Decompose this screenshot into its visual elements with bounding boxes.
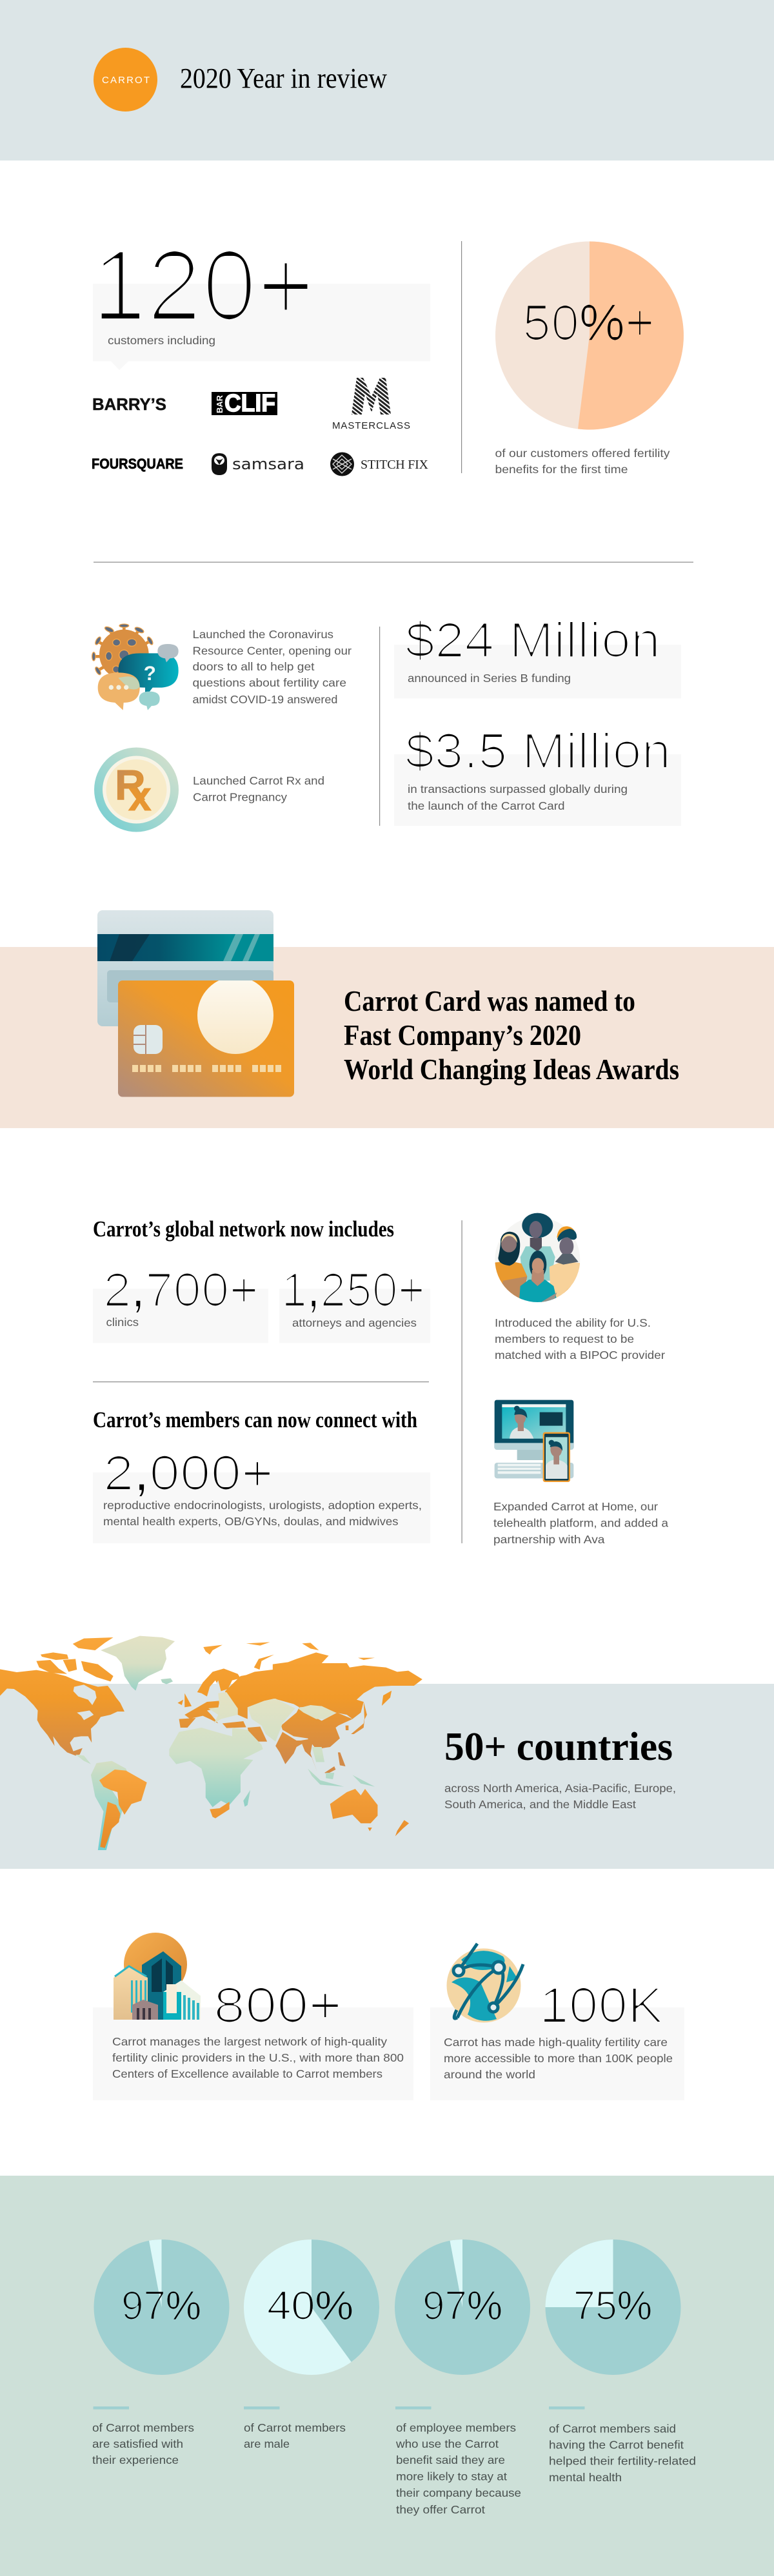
logo: Stitch Fix: STITCH FIX [361,458,429,472]
text: accessibility [444,2036,673,2081]
text: Carrot at Home: Expanded Carrot at Home, our [493,1500,658,1513]
stat: attorneys and agencies: 1,250+ [281,1264,425,1316]
stat: clinics: clinics [106,1316,139,1329]
text: BIPOC provider: Introduced the ability for U.S. [495,1316,651,1329]
stat column: 75% mental health: helped their fertility-related [549,2455,696,2468]
icon: coronavirus with speech bubbles [92,624,179,710]
pie caption: of our customers offered fertility [495,447,670,460]
text: clinic network: Centers of Excellence available to Carrot members [112,2067,382,2080]
stat column: 40% male: of Carrot members [244,2421,346,2434]
illustration: front of card [118,977,294,1097]
stat column: 97% satisfied: of Carrot members [92,2421,194,2434]
text: Carrot Rx [193,774,324,803]
customers label: customers including [108,334,215,347]
logo: Carrot: CARROT [102,75,150,86]
customers callout box [93,284,430,370]
text: Carrot at Home: telehealth platform, and added a [493,1516,668,1529]
icon: telehealth computer and phone [495,1400,573,1482]
stat: $24 Million: $24 Million [405,613,660,668]
providers label: reproductive endocrinologists, urologists, adoption experts, [103,1499,422,1512]
heading: award [344,985,679,1086]
stat column: 40% male [244,2239,379,2450]
panel: member stats [0,2176,774,2576]
world map [0,1636,422,1850]
heading: award: Fast Company’s 2020 [344,1019,581,1051]
transactions label: in transactions surpassed globally during [408,783,628,795]
text: accessibility: around the world [444,2068,535,2081]
icon: Rx badge: x [128,773,152,819]
stat: 120+: 120+ [92,229,315,341]
logo: Clif Bar: CLIF [224,390,275,417]
heading: award: World Changing Ideas Awards [344,1053,679,1086]
panel: Carrot Card award [0,910,774,1128]
stat column: 97% retention [395,2239,530,2516]
panel: global network [93,1216,430,1543]
stat: clinics: 2,700+ [103,1264,259,1316]
text: clinic network [112,2035,404,2080]
stat column: 40% male: 40% [267,2283,353,2328]
stat column: 97% satisfied: 97% [121,2283,201,2328]
icon: group of women [490,1213,580,1304]
stat: attorneys and agencies: attorneys and agencies [292,1316,417,1329]
icon: Rx badge: R [115,761,146,808]
text: coronavirus resource center: questions about fertility care [192,676,346,689]
icon: connected globe [446,1944,523,2023]
stat column: 97% retention: benefit said they are [396,2454,505,2466]
stat column: 97% retention: 97% [422,2283,502,2328]
text: clinic network: Carrot manages the largest network of high-quality [112,2035,387,2048]
panel: 100K people [430,1944,684,2100]
pie chart 50%+ [495,241,684,429]
stat: 800+: 800+ [213,1978,342,2033]
stat column: 75% mental health: 75% [573,2283,652,2328]
stat column: 97% satisfied [92,2239,230,2466]
panel: funding [394,613,681,826]
panel: launches [92,624,352,832]
stat column: 40% male: are male [244,2437,290,2450]
text: coronavirus resource center: amidst COVID-19 answered [192,693,338,706]
transactions label: the launch of the Carrot Card [408,799,565,812]
stat column: 97% retention: of employee members [396,2421,516,2434]
text: Carrot Rx: Launched Carrot Rx and [193,774,324,787]
title: 2020 Year in review [180,63,387,94]
pie caption: benefits for the first time [495,463,628,476]
icon: Rx badge [94,748,179,832]
pie chart 97% [395,2239,530,2375]
panel: fertility benefits pie [495,241,684,476]
text: BIPOC provider: members to request to be [495,1332,634,1345]
pie chart 75% [546,2239,681,2375]
stat column: 75% mental health: mental health [549,2471,622,2484]
stat column: 97% satisfied: are satisfied with [92,2437,183,2450]
logo: Stitch Fix [330,453,429,476]
text: Carrot at Home: partnership with Ava [493,1533,605,1546]
logo: MasterClass [332,378,410,431]
text: clinic network: fertility clinic providers in the U.S., with more than 800 [112,2051,404,2064]
stat column: 97% retention: more likely to stay at [396,2470,507,2483]
logo: Barry's: BARRY’S [92,395,166,414]
stat: 100K: 100K [539,1978,663,2033]
text: Carrot Rx: Carrot Pregnancy [193,790,287,803]
stat column: 97% retention: their company because [396,2486,521,2499]
text: accessibility: Carrot has made high-quality fertility care [444,2036,668,2049]
pie chart 97% [94,2239,230,2375]
pie chart 40% [244,2239,379,2375]
logo: Samsara [212,453,304,475]
text: coronavirus resource center: Launched the Coronavirus [192,628,333,641]
countries text [444,1782,676,1811]
heading: 50+ countries: 50+ countries [444,1725,673,1769]
countries text: across North America, Asia-Pacific, Europe, [444,1782,676,1795]
logo: MasterClass: MASTERCLASS [332,420,410,431]
stat column: 75% mental health: having the Carrot benefit [549,2438,684,2451]
heading: members connect: Carrot’s members can now connect with [93,1407,417,1432]
header band [0,0,774,161]
pie caption [495,447,670,476]
text: coronavirus resource center [192,628,352,706]
stat: 2,000+: 2,000+ [103,1446,273,1501]
text: BIPOC provider: matched with a BIPOC provider [495,1349,665,1361]
stat: 50%+: 50%+ [522,294,655,351]
icon: hospital buildings [114,1933,201,2020]
logo: Samsara: samsara [232,455,304,473]
transactions label [408,783,628,812]
stat column: 75% mental health: of Carrot members said [549,2423,676,2435]
providers label: mental health experts, OB/GYNs, doulas, and midwives [103,1515,399,1528]
text: BIPOC provider [495,1316,665,1361]
stat column: 75% mental health [546,2239,696,2484]
heading: global network: Carrot’s global network now includes [93,1216,394,1242]
text: coronavirus resource center: Resource Center, opening our [192,645,352,658]
logo: Clif Bar: BAR [215,395,224,413]
text: accessibility: more accessible to more than 100K people [444,2052,673,2065]
funding label: announced in Series B funding [408,672,571,685]
text: coronavirus resource center: doors to all to help get [192,660,315,673]
stat column: 97% retention: who use the Carrot [395,2437,499,2450]
providers label [103,1499,422,1528]
illustration: back of card [97,910,273,1026]
logo: Carrot [94,48,157,112]
stat: $3.5 Million: $3.5 Million [405,724,671,779]
panel: BIPOC and at home [490,1213,668,1546]
panel: customers [92,229,430,476]
panel: 800+ clinics [93,1933,413,2100]
stat column: 97% retention: they offer Carrot [396,2503,485,2516]
countries text: South America, and the Middle East [444,1798,636,1811]
logo: Foursquare: FOURSQUARE [92,456,183,472]
icon: coronavirus with speech bubbles: ? [144,661,156,685]
panel: world map band [0,1636,774,1869]
text: Carrot at Home [493,1500,668,1546]
heading: award: Carrot Card was named to [344,985,635,1017]
stat column: 97% satisfied: their experience [92,2454,179,2466]
